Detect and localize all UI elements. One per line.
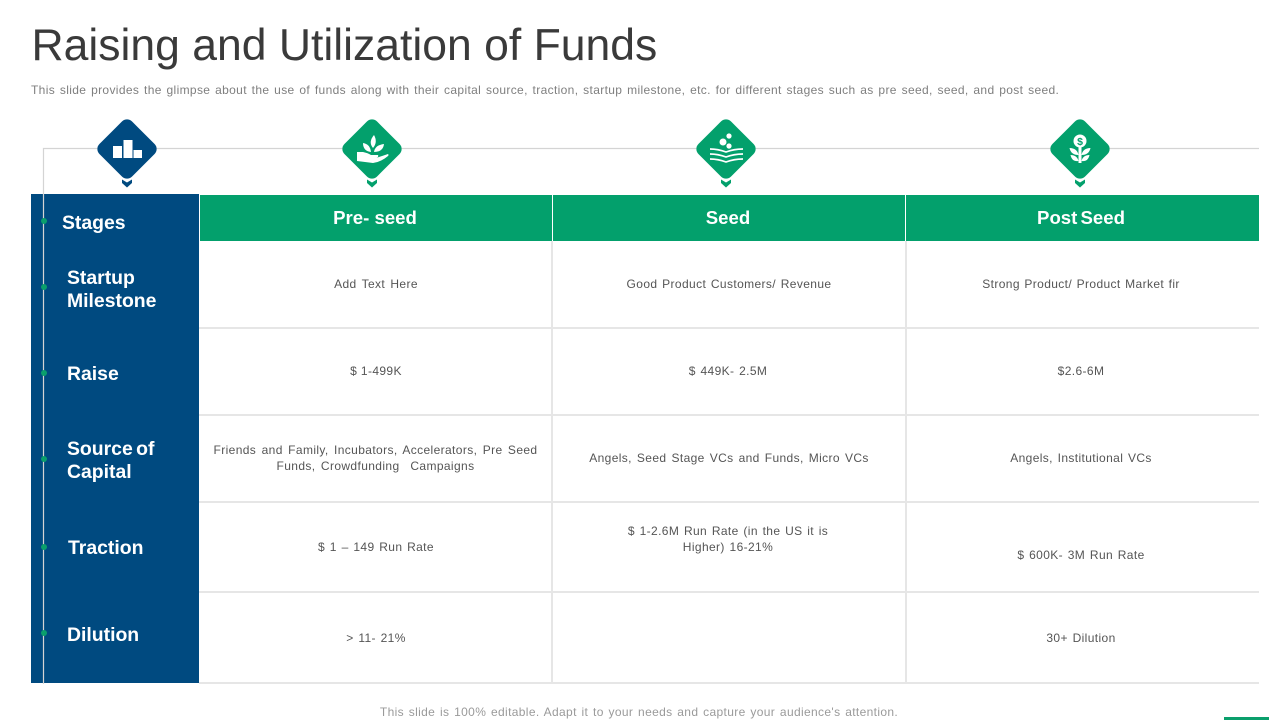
header: Post Seed xyxy=(906,195,1259,241)
left stage column xyxy=(31,194,199,683)
cell xyxy=(628,524,828,554)
header: Pre-seed xyxy=(200,195,552,241)
cell: $ 1-2.6M Run Rate (in the US it is xyxy=(628,524,828,538)
cell: Friends and Family, Incubators, Accelerators, Pre Seed xyxy=(214,443,537,457)
header label: Pre-seed: Pre- seed xyxy=(333,207,417,228)
icon: money plant xyxy=(1050,119,1110,188)
row label: Source of Capital: Source of xyxy=(67,438,154,460)
cell: > 11- 21% xyxy=(346,631,406,645)
corner accent xyxy=(1224,717,1269,720)
grid: horizontal rule xyxy=(199,414,1259,416)
row label: Source of Capital xyxy=(67,438,154,482)
timeline dot xyxy=(41,630,47,636)
header label: Seed: Seed xyxy=(706,207,750,228)
timeline dot xyxy=(41,284,47,290)
cell: Strong Product/ Product Market fir xyxy=(982,277,1180,291)
timeline dot xyxy=(41,218,47,224)
cell: $ 449K- 2.5M xyxy=(689,364,767,378)
grid: horizontal rule xyxy=(199,327,1259,329)
title: Raising and Utilization of Funds xyxy=(32,20,657,70)
cell: $ 600K- 3M Run Rate xyxy=(1017,548,1145,562)
header: Seed xyxy=(553,195,905,241)
cell: $ 1 – 149 Run Rate xyxy=(318,540,434,554)
timeline dot xyxy=(41,370,47,376)
row label: Startup Milestone: Milestone xyxy=(67,290,156,312)
footer note: This slide is 100% editable. Adapt it to your needs and capture your audience's attention. xyxy=(380,705,898,719)
cell: Angels, Seed Stage VCs and Funds, Micro VCs xyxy=(589,451,869,465)
row label: Stages: Stages xyxy=(62,212,126,234)
icon: stages bars xyxy=(97,119,157,188)
timeline dot xyxy=(41,544,47,550)
grid: vertical rule xyxy=(905,241,907,684)
grid: horizontal rule xyxy=(199,682,1259,684)
header label: Post Seed: Post Seed xyxy=(1037,207,1125,228)
grid: vertical rule xyxy=(551,241,553,684)
timeline dot xyxy=(41,456,47,462)
cell: 30+ Dilution xyxy=(1046,631,1116,645)
cell: $ 1-499K xyxy=(350,364,402,378)
row label: Startup Milestone: Startup xyxy=(67,266,135,288)
grid: horizontal rule xyxy=(199,591,1259,593)
cell: $2.6-6M xyxy=(1058,364,1104,378)
cell xyxy=(214,443,537,473)
icon: hand with plant xyxy=(342,119,402,188)
cell: Funds, Crowdfunding Campaigns xyxy=(277,459,474,473)
cell: Angels, Institutional VCs xyxy=(1010,451,1152,465)
icon: coins over water xyxy=(696,119,756,188)
cell: Higher) 16-21% xyxy=(683,540,773,554)
row label: Dilution: Dilution xyxy=(67,624,139,646)
row label: Raise: Raise xyxy=(67,362,119,384)
cell: Add Text Here xyxy=(334,277,418,291)
grid: horizontal rule xyxy=(199,501,1259,503)
row label: Startup Milestone xyxy=(67,266,156,312)
subtitle: This slide provides the glimpse about the use of funds along with their capital source, traction, startup milestone, etc. for different stages such as pre seed, seed, and post seed. xyxy=(31,83,1059,97)
cell: Good Product Customers/ Revenue xyxy=(627,277,831,291)
icon: money plant: $ xyxy=(1077,136,1083,148)
row label: Source of Capital: Capital xyxy=(67,460,132,482)
row label: Traction: Traction xyxy=(68,536,143,558)
